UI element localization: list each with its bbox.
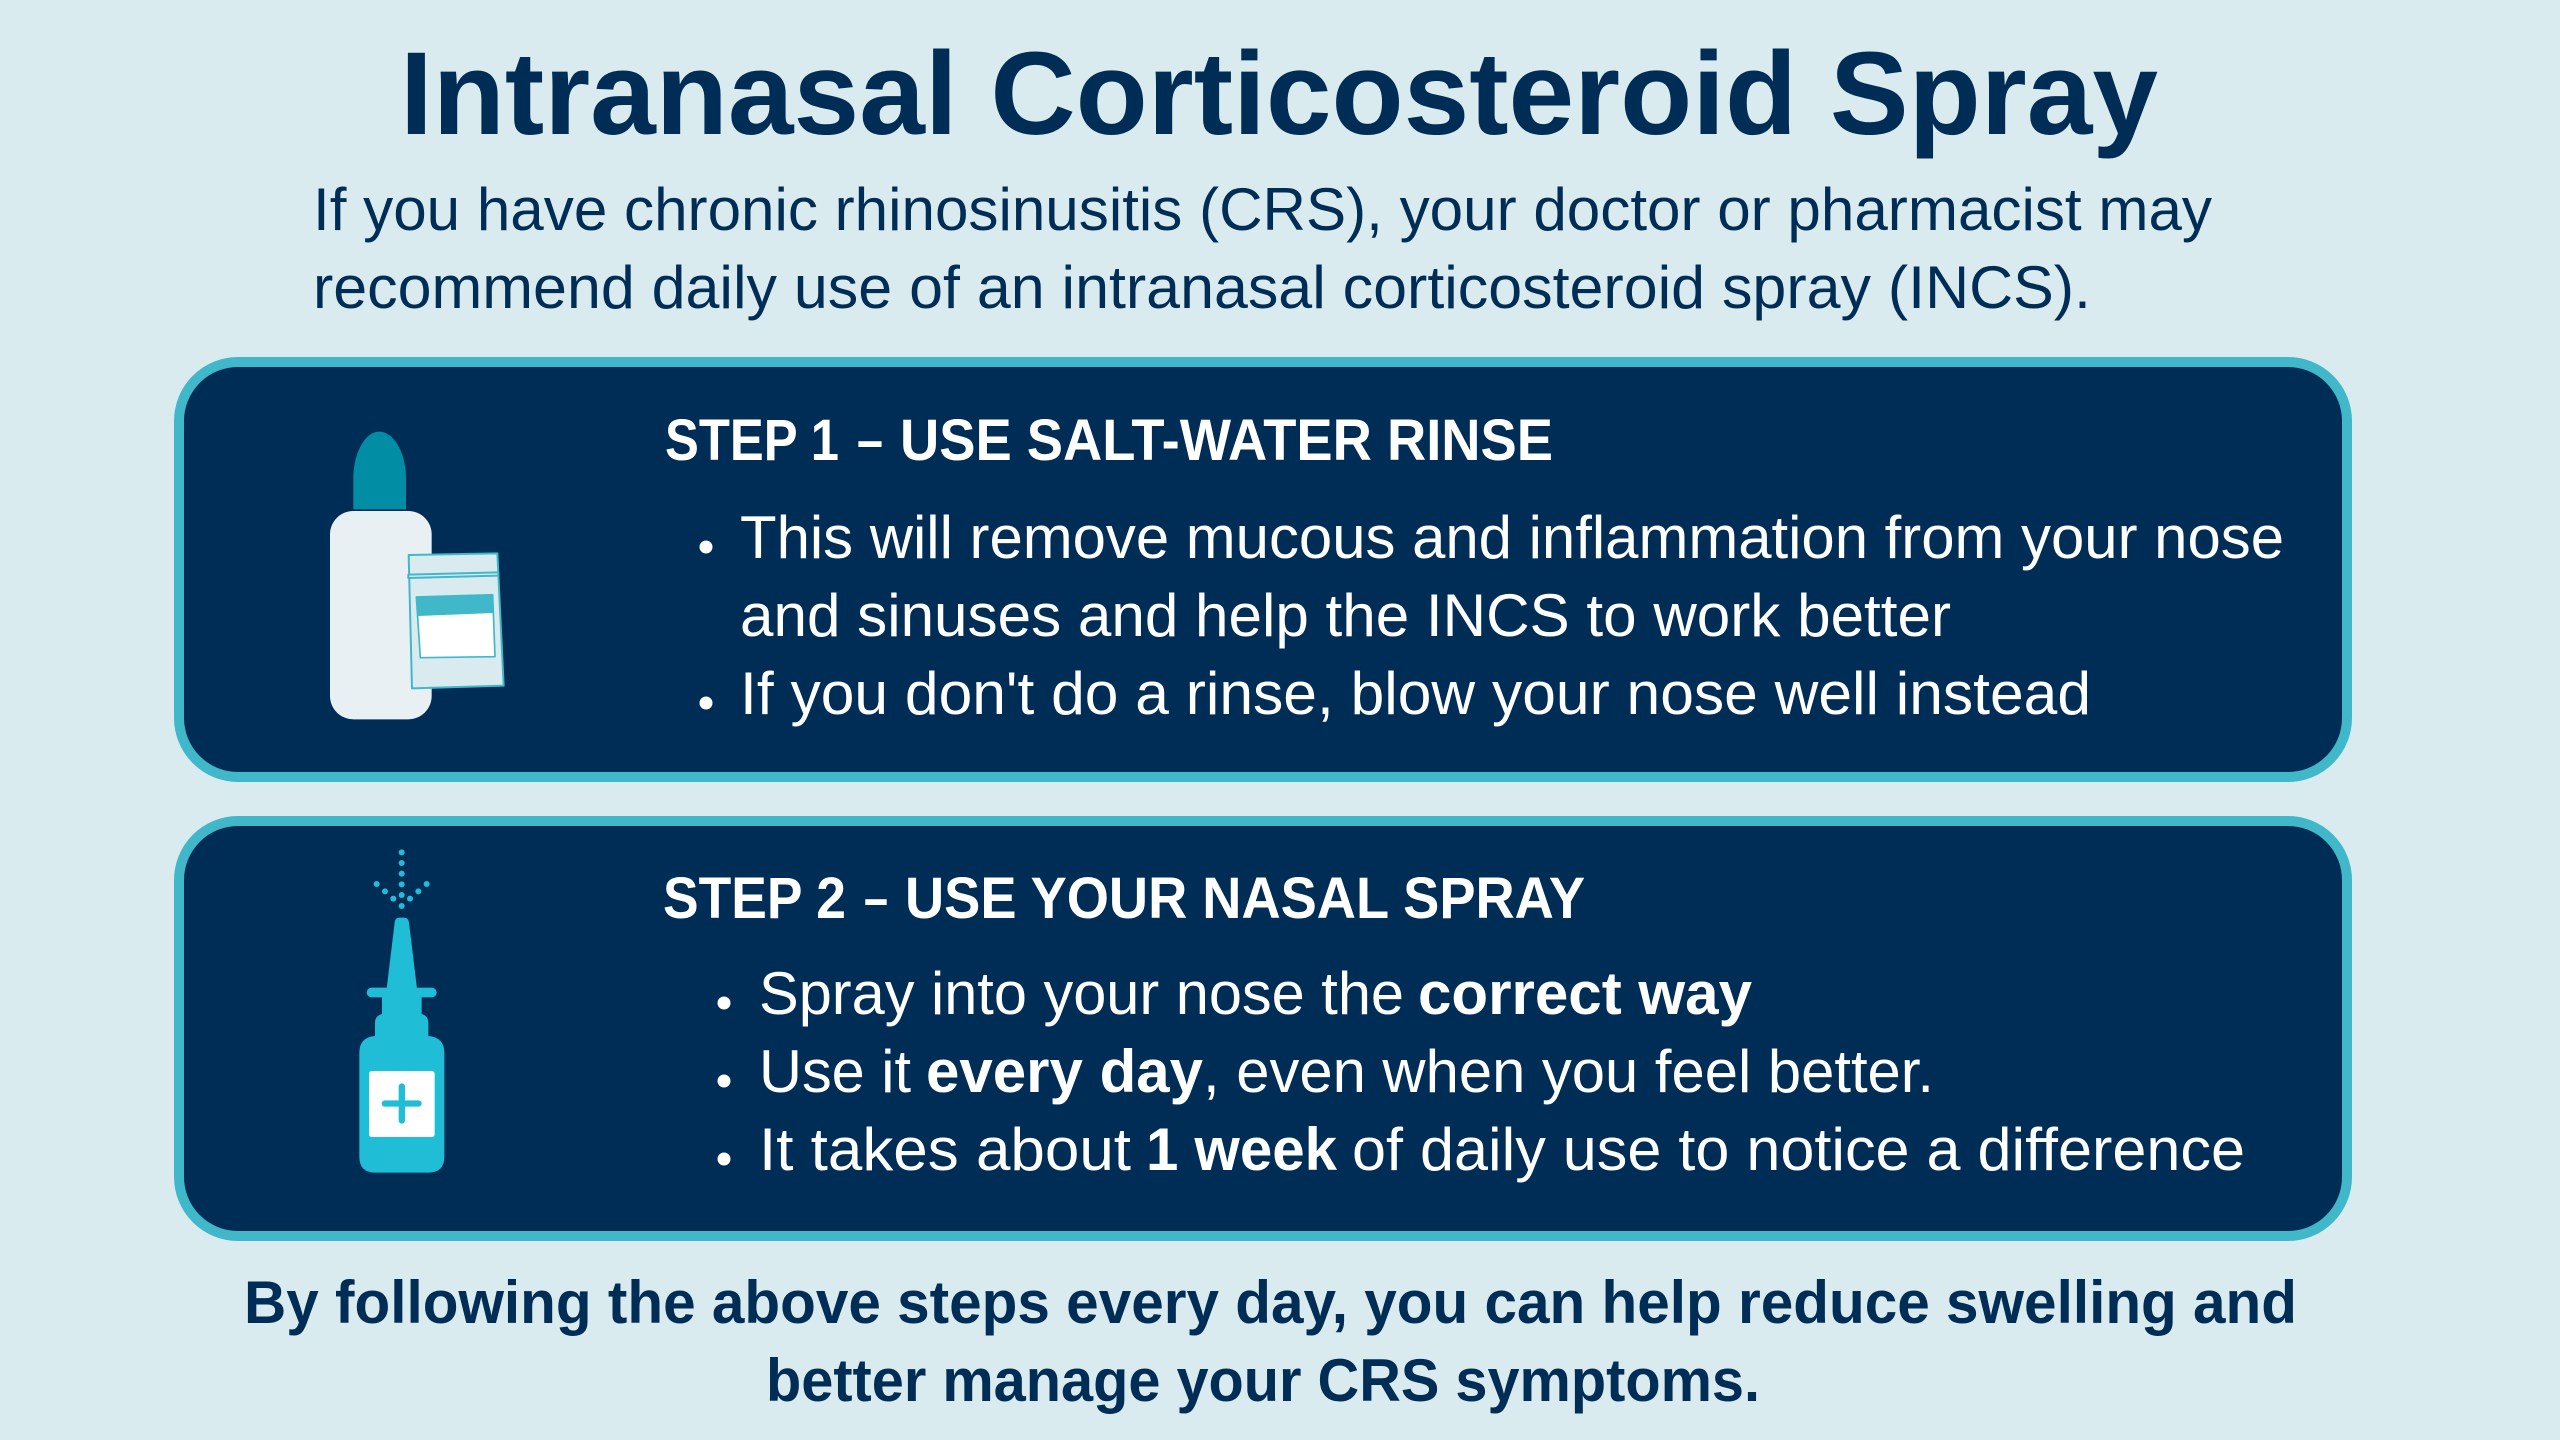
step 1 heading: USE SALT-WATER RINSE	[900, 408, 1553, 473]
step 2 bullets: of daily use to notice a difference	[1352, 1116, 2245, 1183]
intro text	[313, 176, 2212, 321]
step 1 bullets	[700, 504, 2284, 727]
step 2 bullets: every day	[926, 1038, 1204, 1105]
step 2 bullets: Spray into your nose the	[759, 960, 1404, 1027]
intro text: If you have chronic rhinosinusitis (CRS), your doctor or pharmacist may	[313, 176, 2212, 243]
step 1 heading: STEP 1	[665, 408, 839, 473]
icon: saline rinse bottle and salt packet	[330, 432, 504, 719]
icon: nasal spray bottle	[359, 849, 444, 1173]
step 1 heading: –	[857, 408, 883, 473]
closing statement: By following the above steps every day, you can help reduce swelling and	[244, 1269, 2297, 1336]
step 2 heading: USE YOUR NASAL SPRAY	[905, 866, 1585, 931]
step 2 bullets: It takes about	[759, 1116, 1131, 1183]
step 2 bullets: Use it	[759, 1038, 911, 1105]
title: Intranasal Corticosteroid Spray	[400, 28, 2158, 160]
intro text: recommend daily use of an intranasal corticosteroid spray (INCS).	[313, 254, 2091, 321]
step 2 bullets: , even when you feel better.	[1203, 1038, 1934, 1105]
panel: step 1	[179, 362, 2347, 777]
closing statement	[244, 1269, 2297, 1414]
step 2 bullets: correct way	[1418, 960, 1753, 1027]
panel: step 2	[179, 821, 2347, 1236]
step 1 bullets: This will remove mucous and inflammation from your nose	[740, 504, 2284, 571]
step 2 heading: STEP 2	[663, 866, 846, 931]
step 1 bullets: If you don't do a rinse, blow your nose well instead	[740, 660, 2091, 727]
step 2 bullets: 1 week	[1146, 1116, 1338, 1183]
step 2 heading: –	[864, 866, 888, 931]
step 2 bullets	[718, 960, 2245, 1183]
step 1 bullets: and sinuses and help the INCS to work better	[740, 582, 1951, 649]
closing statement: better manage your CRS symptoms.	[766, 1347, 1760, 1414]
